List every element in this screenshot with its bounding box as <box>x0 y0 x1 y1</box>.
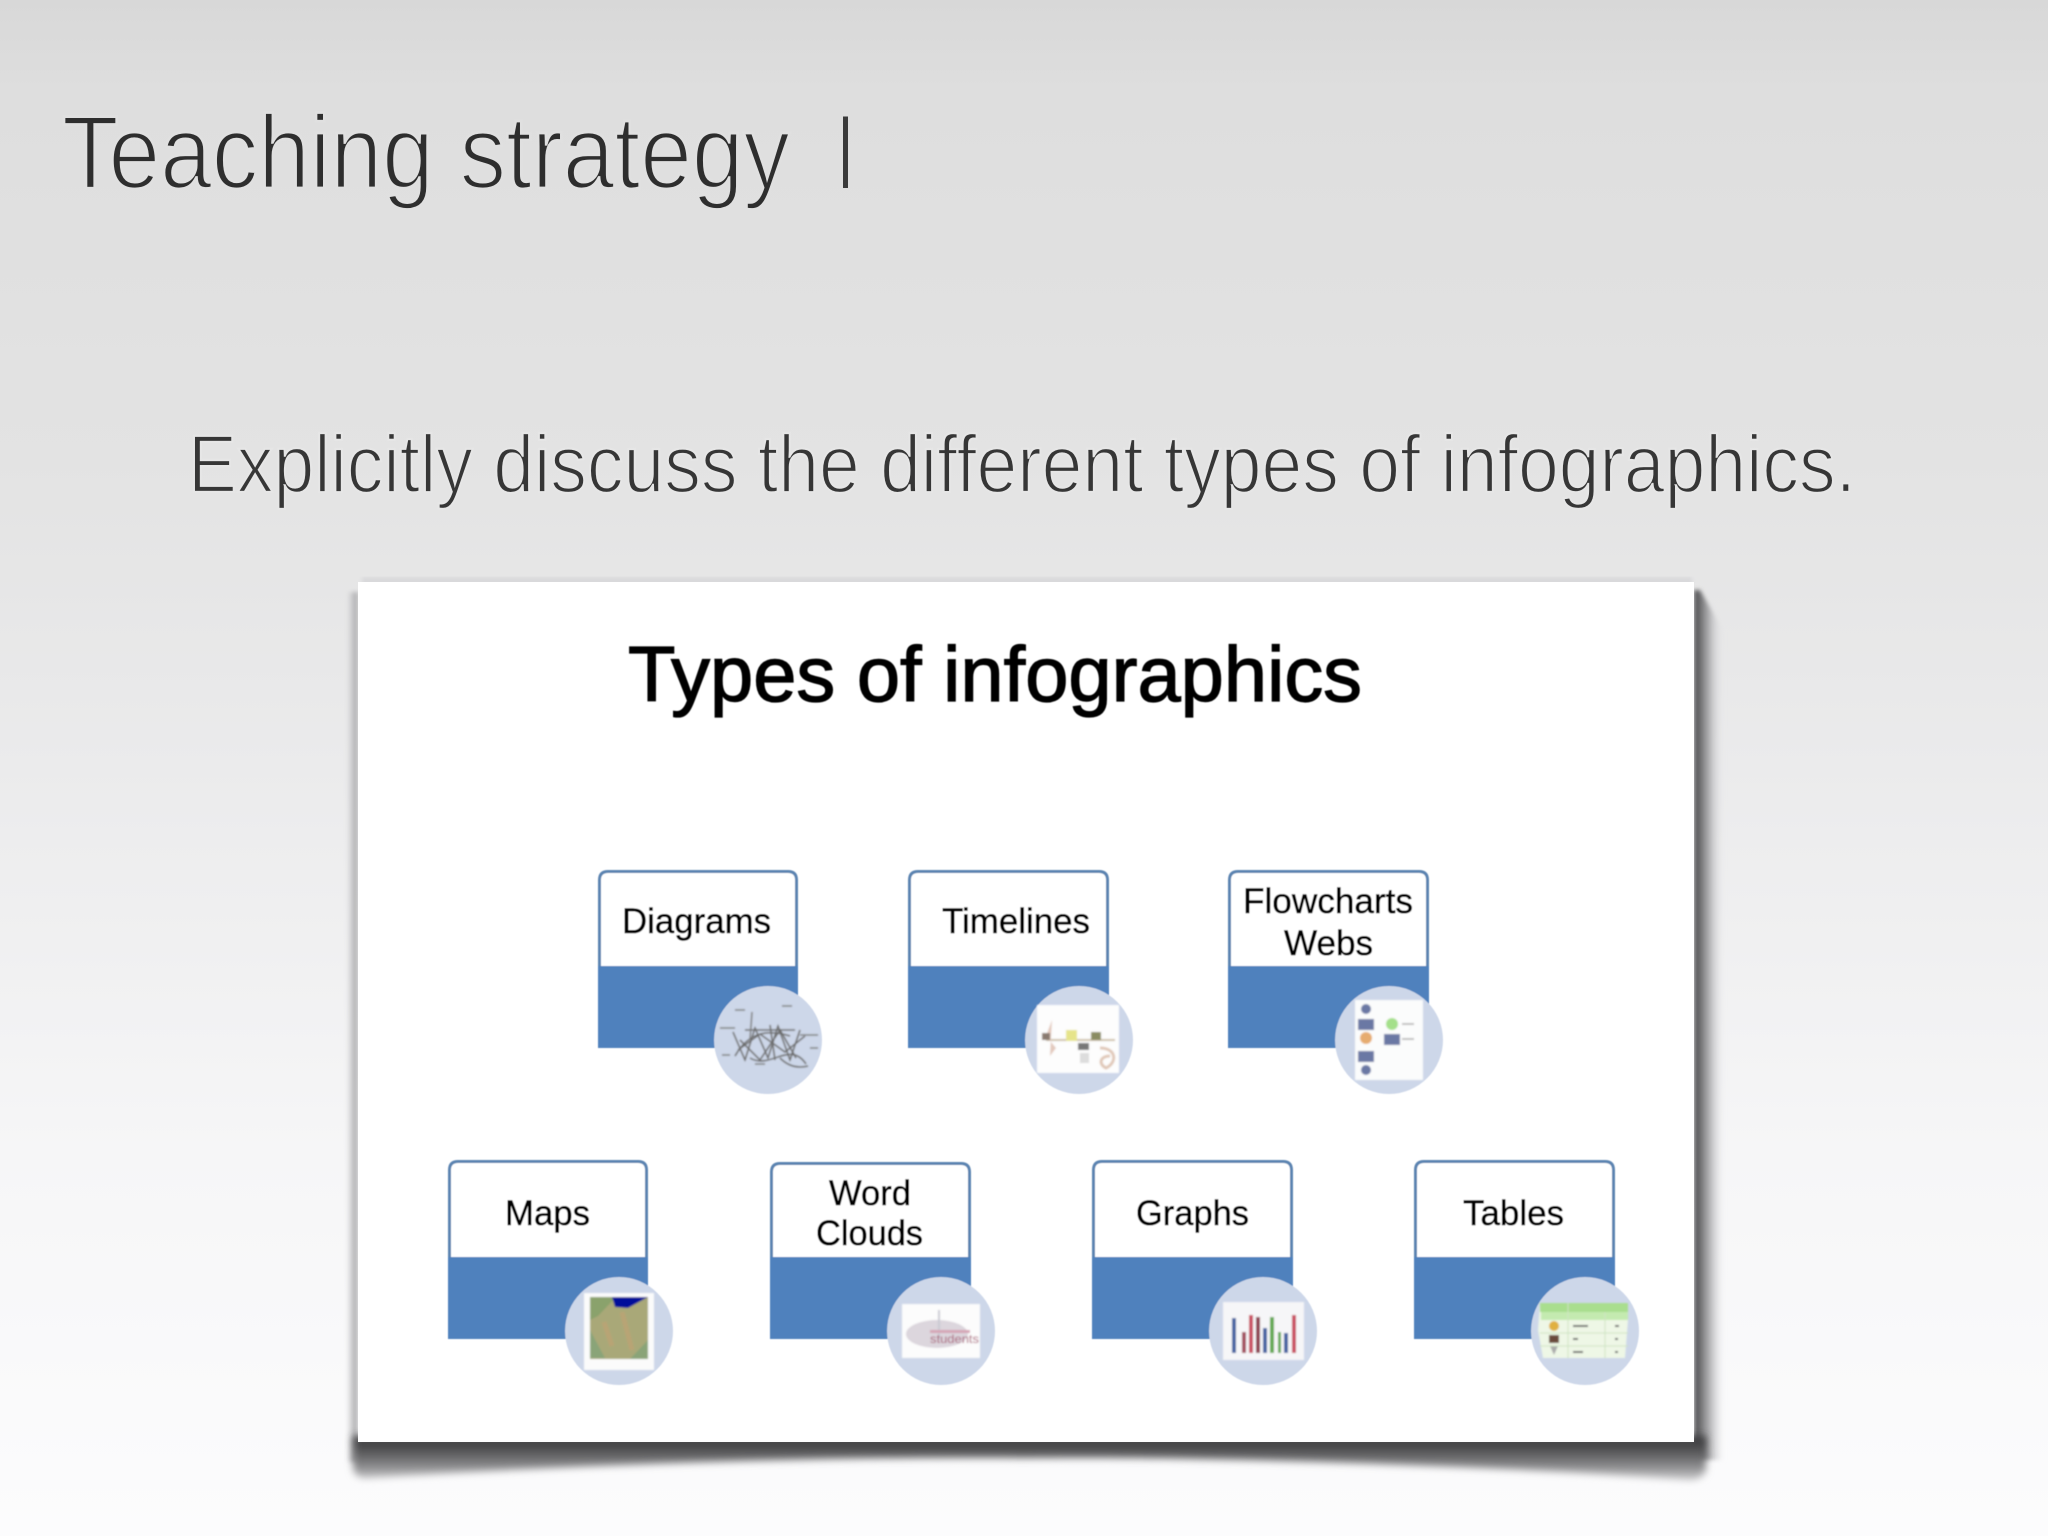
icon: word cloud thumbnail: students <box>930 1332 979 1346</box>
card: Graphs <box>1092 1162 1317 1385</box>
icon: flowchart thumbnail <box>1335 986 1443 1094</box>
card: Word Clouds: Word <box>829 1174 911 1213</box>
panel: embedded slide <box>358 582 1694 1442</box>
icon: table thumbnail <box>1531 1277 1639 1385</box>
card: Diagrams: Diagrams <box>622 902 771 941</box>
card: Graphs: Graphs <box>1136 1194 1249 1233</box>
card: Flowcharts Webs: Webs <box>1284 924 1373 963</box>
slide shadow <box>346 577 1724 1480</box>
icon: bar graph thumbnail <box>1209 1277 1317 1385</box>
card: Word Clouds: Clouds <box>816 1214 923 1253</box>
card: Timelines: Timelines <box>942 902 1090 941</box>
card: Maps: Maps <box>505 1194 590 1233</box>
card: Diagrams <box>598 872 822 1094</box>
card: Tables <box>1414 1162 1639 1385</box>
slide heading: Types of infographics <box>628 630 1362 718</box>
icon: diagram thumbnail <box>714 986 822 1094</box>
icon: timeline thumbnail <box>1025 986 1133 1094</box>
subtitle: Explicitly discuss the different types of infographics. <box>188 419 1856 510</box>
card: Flowcharts Webs <box>1228 872 1443 1094</box>
icon: map thumbnail <box>565 1277 673 1385</box>
card: Timelines <box>908 872 1133 1094</box>
icon: word cloud thumbnail <box>887 1277 995 1385</box>
title: 1 <box>814 95 872 211</box>
card: Word Clouds <box>770 1164 995 1385</box>
card: Flowcharts Webs: Flowcharts <box>1243 882 1413 921</box>
title: Teaching strategy <box>62 95 790 211</box>
card: Tables: Tables <box>1463 1194 1564 1233</box>
card: Maps <box>448 1162 673 1385</box>
